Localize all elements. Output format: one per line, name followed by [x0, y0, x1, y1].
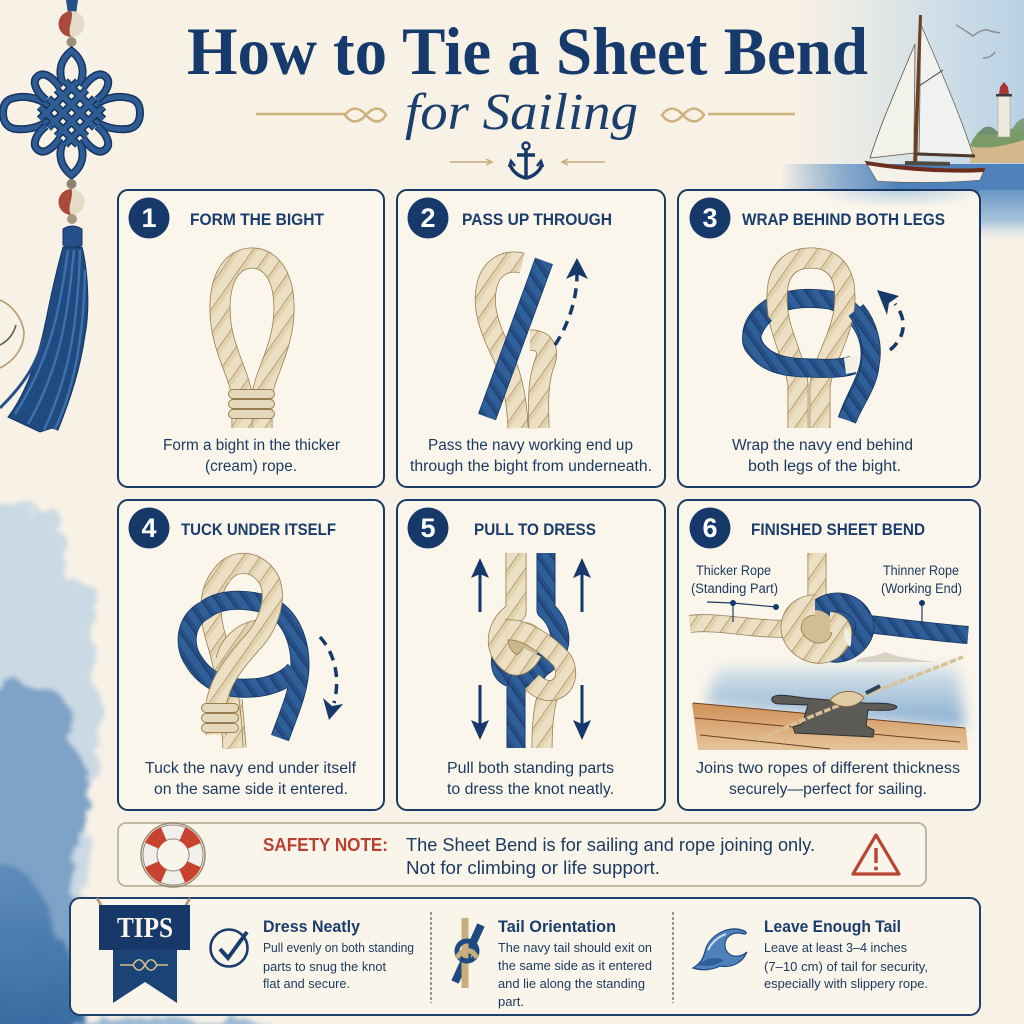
hull	[865, 161, 985, 182]
caption	[163, 437, 340, 475]
caption	[447, 760, 614, 798]
number badge	[690, 508, 730, 548]
jib	[870, 44, 915, 158]
number badge	[128, 198, 170, 238]
panel: step 2	[397, 190, 665, 487]
tips banner	[97, 898, 190, 1003]
caption	[696, 760, 960, 798]
anchor rule arrows	[450, 159, 605, 165]
cleat	[772, 695, 897, 737]
heading: TUCK UNDER ITSELF	[181, 521, 336, 539]
safety text	[406, 834, 815, 878]
scene: sea and dock with cleat	[692, 652, 968, 750]
number badge: 6	[702, 513, 718, 543]
tip: tail orientation: and lie along the standing	[498, 976, 645, 991]
heading: WRAP BEHIND BOTH LEGS	[742, 211, 945, 229]
cream and navy ropes	[187, 563, 300, 748]
icon: tail knot	[455, 918, 481, 988]
bead	[58, 11, 84, 37]
label: thinner rope	[881, 563, 962, 625]
number badge: 2	[420, 203, 436, 233]
tip: tail orientation: Tail Orientation	[498, 917, 616, 936]
small bead	[67, 214, 77, 224]
label: thicker rope	[691, 563, 779, 622]
icon: warning triangle	[853, 835, 899, 874]
tip: dress neatly: parts to snug the knot	[263, 959, 386, 974]
safety text: The Sheet Bend is for sailing and rope joining only.	[406, 834, 815, 855]
finished knot	[690, 553, 968, 653]
number badge: 5	[420, 513, 436, 543]
tip: tail orientation	[498, 917, 652, 1009]
icon: wave	[693, 929, 747, 970]
number badge: 1	[141, 203, 157, 233]
caption: through the bight from underneath.	[410, 458, 652, 475]
tip: dress neatly: Dress Neatly	[263, 917, 361, 936]
arrow: up	[555, 258, 588, 345]
tip: leave enough tail: Leave at least 3–4 inches	[764, 940, 907, 955]
divider: left flourish	[256, 109, 386, 121]
caption	[410, 437, 652, 475]
tip: tail orientation: the same side as it entered	[498, 958, 652, 973]
number badge	[408, 508, 448, 548]
tips banner: TIPS	[117, 912, 173, 944]
tip: tail orientation: The navy tail should exit on	[498, 940, 652, 955]
caption: on the same side it entered.	[154, 781, 348, 798]
rope bight	[220, 258, 284, 428]
island	[970, 128, 1024, 163]
label: thinner rope: (Working End)	[881, 581, 962, 596]
number badge	[408, 198, 448, 238]
arrow: down	[320, 637, 343, 720]
icon: lifebuoy	[141, 823, 205, 887]
icon: anchor	[509, 142, 543, 178]
caption: securely—perfect for sailing.	[729, 781, 927, 798]
tip: leave enough tail: especially with slippery rope.	[764, 976, 928, 991]
panel: step 6	[678, 500, 980, 810]
cream and navy ropes	[752, 258, 871, 428]
subtitle: for Sailing	[405, 84, 638, 141]
scene: island and lighthouse	[970, 82, 1024, 163]
caption	[145, 760, 357, 798]
heading: PASS UP THROUGH	[462, 211, 612, 229]
label: thicker rope: (Standing Part)	[691, 581, 778, 596]
tip: leave enough tail	[764, 917, 928, 991]
heading: PULL TO DRESS	[474, 521, 596, 539]
number badge: 4	[141, 513, 157, 543]
panel: safety note	[118, 823, 926, 887]
caption: Form a bight in the thicker	[163, 437, 340, 454]
panel: step 4	[118, 500, 384, 810]
caption: Tuck the navy end under itself	[145, 760, 357, 777]
cleat line	[758, 657, 963, 740]
mainsail	[919, 25, 973, 155]
caption: Wrap the navy end behind	[732, 437, 913, 454]
tip: leave enough tail: (7–10 cm) of tail for security,	[764, 959, 928, 974]
ornament: Chinese knot with tassel	[0, 0, 140, 432]
heading: FORM THE BIGHT	[190, 211, 324, 229]
birds	[956, 25, 1000, 58]
icon: check	[210, 930, 248, 966]
dressed knot	[498, 553, 566, 748]
label: thinner rope: Thinner Rope	[883, 563, 959, 578]
small lower bead	[66, 179, 76, 189]
tassel cap	[63, 226, 82, 248]
number badge: 3	[702, 203, 718, 233]
caption: Pull both standing parts	[447, 760, 614, 777]
caption: (cream) rope.	[205, 458, 297, 475]
watercolor wash: left lower	[0, 503, 280, 1024]
tassel strands	[0, 247, 88, 432]
stain mark	[0, 300, 24, 368]
number badge	[128, 508, 170, 548]
safety label: SAFETY NOTE:	[263, 835, 388, 855]
tip: dress neatly: Pull evenly on both standing	[263, 940, 414, 955]
sea band	[780, 164, 1024, 242]
caption: to dress the knot neatly.	[447, 781, 614, 798]
small bead	[66, 37, 76, 47]
top cord	[66, 0, 78, 14]
arrow: around	[877, 290, 903, 350]
panel: step 5	[397, 500, 665, 810]
lower bead	[58, 189, 84, 215]
lighthouse	[996, 82, 1012, 137]
safety text: Not for climbing or life support.	[406, 857, 660, 878]
panel: step 3	[678, 190, 980, 487]
cream and navy ropes	[485, 261, 546, 428]
arrows: pull	[471, 558, 591, 740]
caption	[732, 437, 913, 475]
caption: both legs of the bight.	[748, 458, 901, 475]
tip: dress neatly	[263, 917, 414, 991]
number badge	[690, 198, 730, 238]
endless knot	[3, 51, 140, 175]
tip: leave enough tail: Leave Enough Tail	[764, 917, 901, 936]
caption: Pass the navy working end up	[428, 437, 633, 454]
caption: Joins two ropes of different thickness	[696, 760, 960, 777]
tip: dress neatly: flat and secure.	[263, 976, 350, 991]
panel: step 1	[118, 190, 384, 487]
divider: right flourish	[662, 109, 795, 121]
mast	[913, 15, 922, 165]
panel: tips	[70, 898, 980, 1015]
heading: FINISHED SHEET BEND	[751, 521, 925, 539]
title: How to Tie a Sheet Bend	[187, 13, 868, 89]
tip: tail orientation: part.	[498, 994, 524, 1009]
label: thicker rope: Thicker Rope	[696, 563, 771, 578]
watercolor wash: sky top right	[790, 0, 1024, 170]
scene: sailboat	[865, 15, 985, 182]
